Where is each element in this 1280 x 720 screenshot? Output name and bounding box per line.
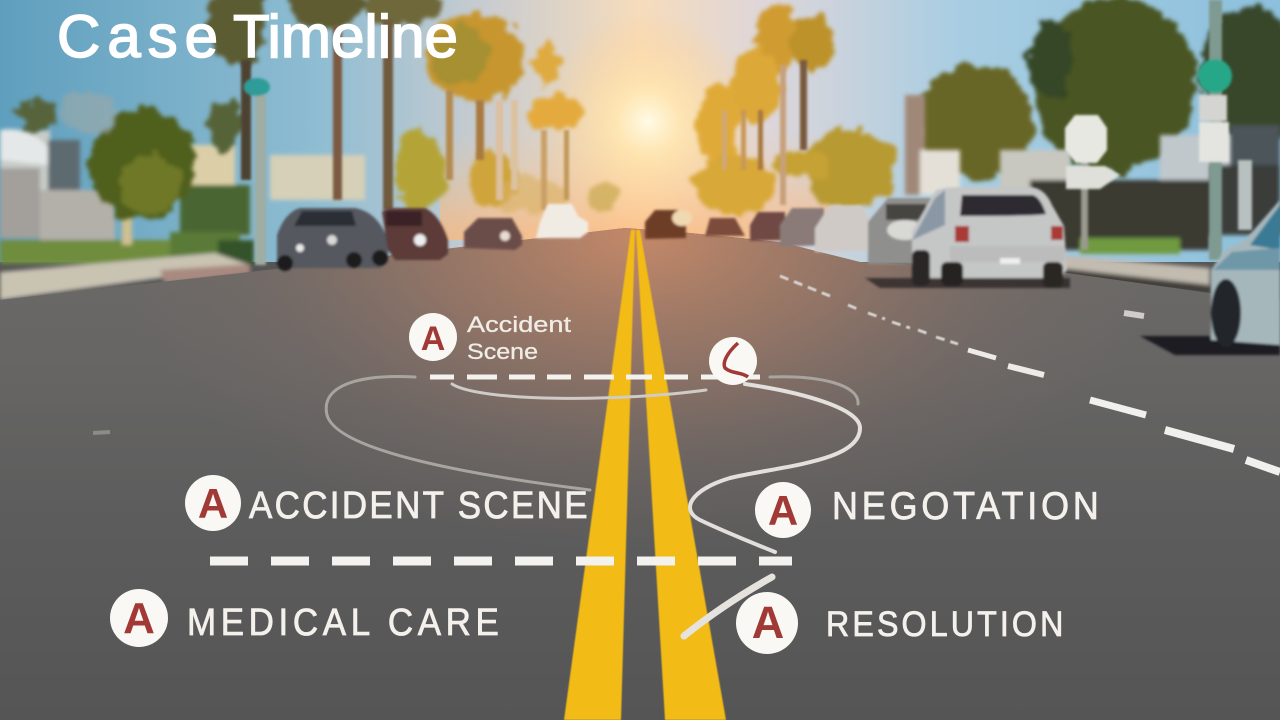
marker: resolution xyxy=(736,592,1063,654)
title: Timeline xyxy=(233,3,458,70)
marker: medical care: A xyxy=(123,594,155,643)
marker: resolution: RESOLUTION xyxy=(826,606,1063,644)
parked cars right xyxy=(645,187,1280,355)
car: far sedan xyxy=(464,218,522,250)
parked cars left xyxy=(277,204,588,271)
title: Case xyxy=(57,3,218,70)
title xyxy=(57,3,458,70)
left palm trees xyxy=(15,0,619,220)
car: center dark xyxy=(645,210,686,239)
right palm trunks xyxy=(722,60,807,205)
car: white van xyxy=(536,204,588,238)
marker: accident scene: A xyxy=(198,480,228,527)
road surface xyxy=(0,228,1280,720)
marker: C on route xyxy=(709,337,757,385)
marker: small accident scene: Accident xyxy=(467,312,571,337)
marker: small accident scene: Scene xyxy=(467,339,538,364)
marker: accident scene xyxy=(185,475,588,531)
car: silver hatchback xyxy=(865,187,1070,288)
background sky xyxy=(0,0,1280,262)
road signs right xyxy=(1065,0,1252,260)
marker: negotiation: A xyxy=(768,487,798,534)
marker: accident scene: ACCIDENT SCENE xyxy=(249,484,588,526)
car: grey sedan xyxy=(277,208,388,271)
left palm trunks and signpost xyxy=(241,20,569,265)
marker: medical care: MEDICAL CARE xyxy=(187,601,499,643)
car: red sedan xyxy=(382,208,448,260)
car: right edge blue xyxy=(1140,200,1280,355)
right side buildings xyxy=(905,95,1280,293)
lane markings right xyxy=(93,276,1280,472)
upper dashed line xyxy=(430,374,760,380)
marker: negotiation xyxy=(755,482,1099,538)
marker: resolution: A xyxy=(752,597,784,648)
left side houses and trees xyxy=(0,129,365,300)
marker: small accident scene: A xyxy=(421,320,445,358)
lower dashed line xyxy=(210,556,792,566)
marker: negotiation: NEGOTATION xyxy=(832,484,1099,527)
timeline route line xyxy=(326,377,860,636)
yellow centre lines xyxy=(564,230,726,720)
marker: small accident scene xyxy=(409,312,571,364)
marker: medical care xyxy=(110,589,499,647)
right trees xyxy=(695,0,1280,215)
